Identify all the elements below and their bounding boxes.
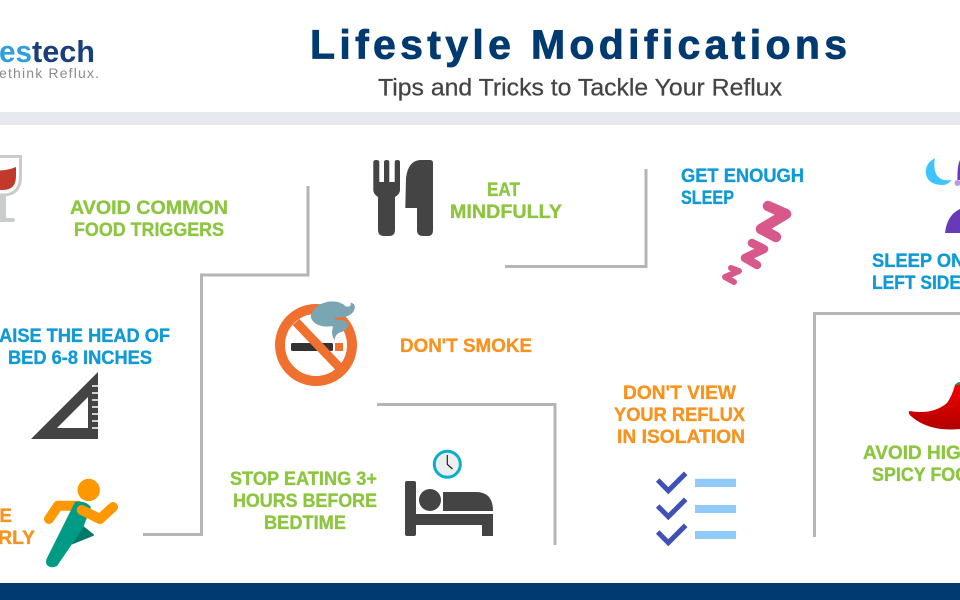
header band — [0, 112, 960, 125]
tip: avoid common food triggers — [70, 197, 228, 241]
icon: clock — [434, 451, 460, 477]
tip: get enough sleep — [681, 165, 804, 209]
tip: avoid common food triggers: FOOD TRIGGERS — [74, 219, 224, 241]
tip: raise the head of bed: BED 6-8 INCHES — [8, 347, 152, 369]
icon: no smoking — [280, 301, 355, 381]
tip: don't view your reflux in isolation: IN ISOLATION — [617, 426, 745, 448]
tip: raise the head of bed — [0, 325, 170, 369]
tip: stop eating before bedtime: HOURS BEFORE — [233, 490, 377, 512]
tip: stop eating before bedtime: STOP EATING 3+ — [230, 468, 377, 490]
icon: sleeping person and moon — [926, 158, 960, 233]
icon: set square ruler — [31, 372, 98, 439]
logo: tech — [32, 34, 95, 69]
subtitle: Tips and Tricks to Tackle Your Reflux — [378, 74, 782, 102]
logo — [0, 34, 99, 81]
tip: avoid highly spicy foods — [863, 442, 960, 486]
icon: checklist — [658, 473, 736, 543]
title: Lifestyle Modifications — [310, 22, 847, 68]
icon: fork — [373, 160, 400, 236]
tip: don't view your reflux in isolation: DON'T VIEW — [623, 382, 737, 404]
icon: chili pepper — [909, 382, 960, 430]
footer band — [0, 583, 960, 600]
connector line: bottom middle — [377, 404, 555, 545]
icon: knife — [405, 160, 433, 236]
icon: runner — [46, 479, 113, 567]
tip: sleep on left side — [872, 250, 960, 294]
tip: don't smoke: DON'T SMOKE — [400, 335, 532, 357]
connector line: right — [814, 314, 960, 537]
tip: eat mindfully — [450, 179, 562, 223]
tip: eat mindfully: EAT — [487, 179, 520, 201]
tip: don't view your reflux in isolation — [614, 382, 745, 448]
icon: zzz — [725, 206, 786, 282]
tip: avoid common food triggers: AVOID COMMON — [70, 197, 228, 219]
tip: don't view your reflux in isolation: YOUR REFLUX — [614, 404, 745, 426]
tip: stop eating before bedtime: BEDTIME — [264, 512, 346, 534]
icon: wine glass — [0, 156, 20, 222]
connector line: top middle — [505, 169, 646, 266]
tip: stop eating before bedtime — [230, 468, 377, 534]
tip: get enough sleep: SLEEP — [681, 187, 734, 209]
tip: get enough sleep: GET ENOUGH — [681, 165, 804, 187]
tip: exercise regularly — [0, 505, 35, 549]
logo: ethink Reflux. — [0, 65, 99, 81]
tip: eat mindfully: MINDFULLY — [450, 201, 562, 223]
logo: es — [0, 34, 32, 69]
icon: bed — [405, 481, 493, 536]
connector line: left — [143, 186, 308, 534]
